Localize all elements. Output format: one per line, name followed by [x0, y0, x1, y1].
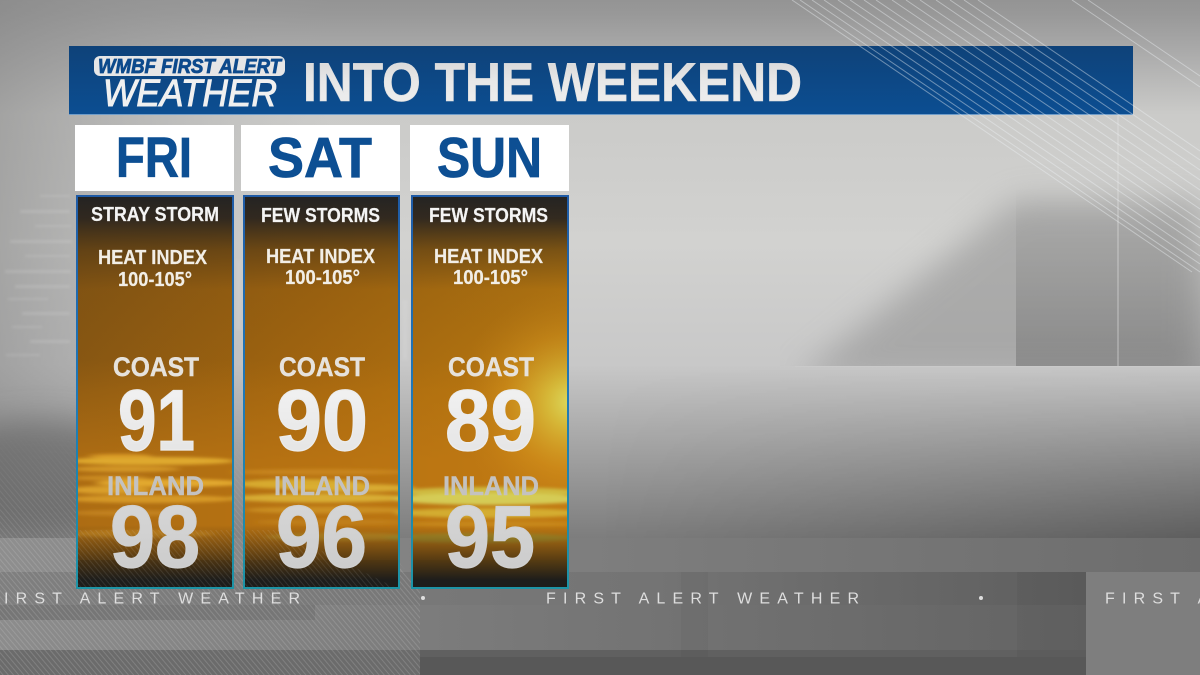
coast high: [113, 352, 199, 469]
day: Friday: [75, 125, 234, 191]
condition: STRAY STORM: [91, 204, 219, 226]
coast high: COAST: [279, 352, 365, 382]
heat index: 100-105°: [118, 269, 192, 291]
inland high: INLAND: [443, 471, 539, 501]
condition: FEW STORMS: [261, 205, 380, 227]
heat index: HEAT INDEX: [98, 247, 208, 269]
heat index: [434, 246, 544, 289]
condition: FEW STORMS: [429, 205, 548, 227]
logo: [94, 56, 285, 115]
clouds: [65, 454, 585, 543]
sunset image shared by forecast panels: [78, 197, 567, 587]
coast high: 91: [118, 373, 195, 469]
day: Saturday: [241, 125, 400, 191]
heat index: [266, 246, 376, 289]
inland high: 95: [445, 487, 535, 586]
panel: Friday forecast: [77, 196, 233, 588]
day: Sunday: SUN: [437, 126, 542, 190]
inland high: 98: [110, 487, 200, 586]
heat index: 100-105°: [285, 267, 360, 289]
title: INTO THE WEEKEND: [303, 51, 802, 113]
panel: Saturday forecast: [244, 196, 399, 588]
title banner: [69, 46, 1133, 115]
coast high: 90: [276, 373, 368, 469]
diagonal accent lines: [792, 0, 1200, 272]
heat index: HEAT INDEX: [266, 246, 376, 268]
day: Friday: FRI: [116, 126, 192, 190]
heat index: [98, 247, 208, 291]
panel: Sunday forecast: [412, 196, 568, 588]
inland high: INLAND: [107, 471, 204, 501]
logo: WMBF FIRST ALERT: [98, 56, 283, 78]
coast high: COAST: [113, 352, 199, 382]
heat index: HEAT INDEX: [434, 246, 544, 268]
heat index: 100-105°: [453, 267, 528, 289]
inland high: INLAND: [274, 471, 370, 501]
day headers: [75, 125, 569, 191]
ticker: FIRST ALERT WEATHER: [546, 590, 859, 608]
coast high: 89: [445, 373, 536, 469]
day: Saturday: SAT: [268, 126, 372, 190]
texture specks at left: [5, 195, 408, 360]
coast high: COAST: [448, 352, 534, 382]
inland high: 96: [276, 487, 367, 586]
logo: WEATHER: [103, 73, 277, 115]
ticker: [0, 590, 1200, 608]
